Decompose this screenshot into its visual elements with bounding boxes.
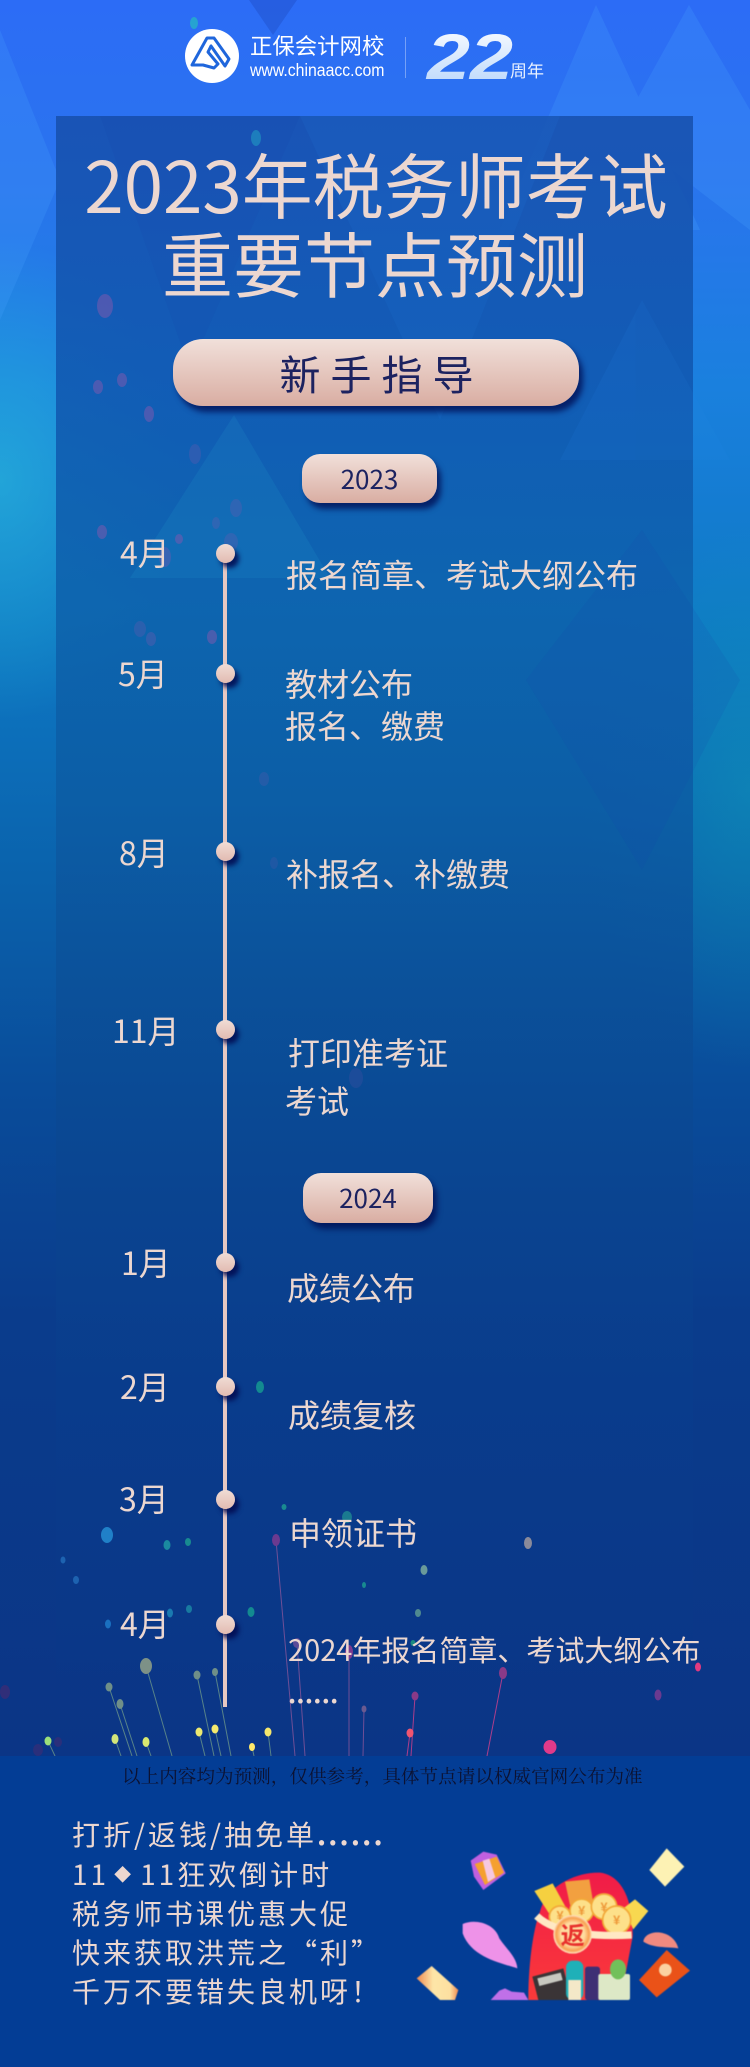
icon: red packet: ¥ [600,1900,608,1914]
month: 2024-02: 2月 [120,1363,170,1409]
event: 2024-03: 申领证书 [289,1509,417,1555]
promo line 4: 快来获取洪荒之“利” [72,1932,382,1972]
section pill: 新手指导 [173,339,579,406]
promo line 1: 打折/返钱/抽免单...... [72,1814,385,1854]
bottom band [0,1756,750,2067]
22 anniversary mark [426,26,544,86]
year pill: 2023: 2023 [341,460,398,497]
timeline line [223,554,226,1707]
illustration: red packet with gifts [416,1848,690,2001]
month: 2024-03: 3月 [119,1475,169,1521]
month: 2023-11: 11月 [112,1007,180,1053]
event: 2024-01: 成绩公布 [287,1264,415,1310]
event: 2023-11 print admission: 打印准考证 [288,1029,448,1075]
title: 重要节点预测 [162,211,588,313]
milestone dot: 2024-03 [216,1490,235,1509]
title: 2023年税务师考试 [84,132,668,234]
milestone dot: 2023-11 [216,1020,235,1039]
year pill: 2024 [303,1173,433,1223]
event: 2023-05: 报名、缴费 [285,702,445,748]
event: 2023-05: 教材公布 [285,660,413,706]
icon: red packet [528,1873,648,2000]
milestone dot: 2023-05 [216,664,235,683]
brand url: www.chinaacc.com [250,60,384,80]
icon: cream diamond [649,1848,684,1887]
milestone dot: 2023-04 [216,544,235,563]
icon: red packet: ¥ [613,1914,620,1928]
event: ellipsis: ...... [288,1675,339,1711]
year pill: 2024: 2024 [339,1179,397,1216]
month: 2024-01: 1月 [121,1239,171,1285]
milestone dot: 2024-02 [216,1377,235,1396]
title [84,132,668,313]
logo: circular brand icon [185,29,239,83]
event: 2023-11 exam: 考试 [285,1077,349,1123]
disclaimer: 以上内容均为预测，仅供参考，具体节点请以权威官网公布为准 [122,1763,643,1789]
promo line 3: 税务师书课优惠大促 [72,1893,351,1933]
month: 2024-04: 4月 [120,1600,170,1646]
icon: ticket [417,1966,458,2000]
month: 2023-05: 5月 [118,650,168,696]
event: 2023-08: 补报名、补缴费 [286,850,510,896]
icon: red packet: ¥ [556,1909,564,1923]
promo line 2: 11 ◆11狂欢倒计时 [72,1854,332,1894]
section pill: 新手指导: 新手指导 [280,342,484,402]
icon: gift box [471,1852,506,1890]
22 anniversary mark: 周年 [510,57,544,82]
event: 2024-04: 2024年报名简章、考试大纲公布 [288,1628,700,1670]
logo divider [405,37,406,78]
icon: red packet: 返 [561,1916,585,1951]
promo text [72,1814,385,2011]
month: 2023-08: 8月 [119,829,169,875]
event: 2024-02: 成绩复核 [288,1391,416,1437]
milestone dot: 2024-04 [216,1615,235,1634]
event: 2023-05 [285,660,445,748]
milestone dot: 2023-08 [216,842,235,861]
brand name: 正保会计网校 [250,29,384,61]
icon: orange envelope [639,1932,690,1997]
icon: red packet: ¥ [578,1904,585,1918]
month: 2023-04: 4月 [120,529,170,575]
milestone dot: 2024-01 [216,1253,235,1272]
icon: pink feather [463,1922,517,1968]
promo line 5: 千万不要错失良机呀！ [72,1971,382,2011]
icon: purple bow [491,1988,528,2000]
event: 2023-04: 报名简章、考试大纲公布 [286,551,638,597]
year pill: 2023 [302,454,437,503]
